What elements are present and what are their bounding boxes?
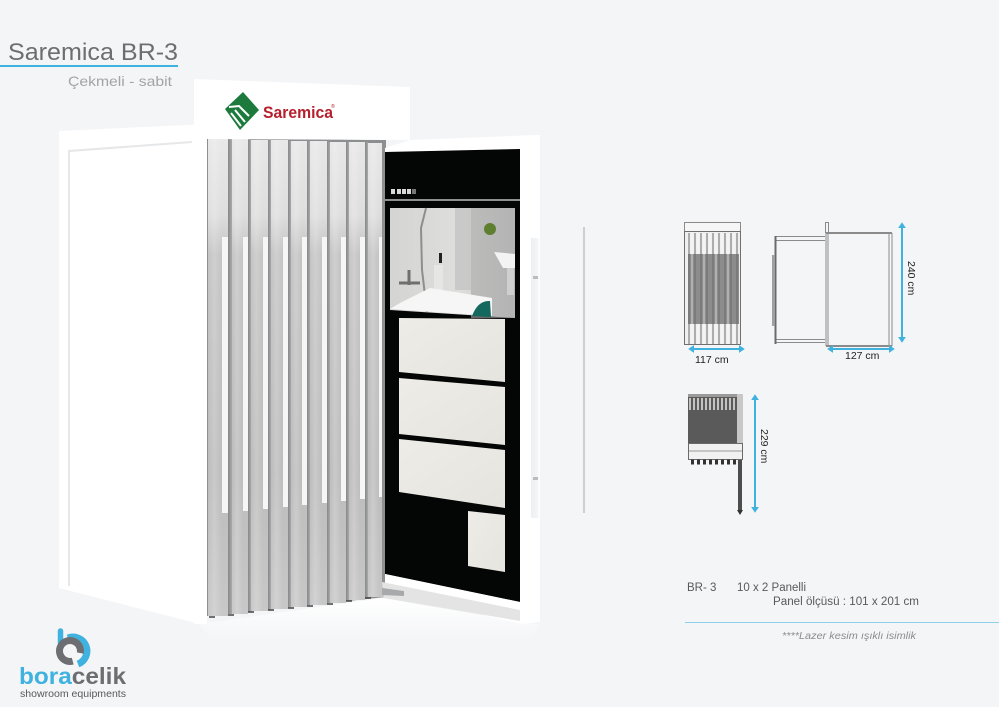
pull-out slats	[208, 139, 384, 616]
dimension: 240 cm: 240 cm	[905, 261, 917, 296]
registered mark: ®	[331, 103, 335, 110]
dimension: 117 cm: 117 cm	[695, 354, 729, 366]
door base shadow	[382, 582, 520, 621]
floor reflection	[200, 598, 540, 640]
dimension: 117 cm	[690, 347, 743, 366]
header sign	[194, 79, 410, 140]
door handle	[531, 238, 540, 518]
pull-out door frame	[385, 135, 540, 624]
white bottom lip	[385, 574, 520, 607]
slat gaps	[228, 139, 368, 614]
bottles	[434, 265, 443, 295]
shower screen	[455, 208, 471, 290]
right wall shade	[471, 208, 515, 318]
dimension: 229 cm: 229 cm	[758, 429, 770, 464]
plant	[484, 223, 496, 235]
specs text: Panel ölçüsü : 101 x 201 cm	[773, 596, 919, 608]
sink	[494, 252, 515, 268]
door side strip	[382, 143, 385, 583]
small icons	[391, 189, 416, 194]
specs text	[687, 582, 919, 608]
slat highlights	[208, 139, 379, 616]
title: Saremica BR-3	[8, 39, 178, 66]
specs rule	[685, 622, 999, 623]
top plan drawing	[772, 222, 892, 346]
specs text: 10 x 2 Panelli	[737, 582, 806, 594]
logo mark	[225, 92, 259, 130]
Saremica logo	[225, 92, 335, 130]
left side wall	[59, 124, 207, 624]
front elevation drawing	[684, 222, 740, 344]
specs text: BR- 3	[687, 582, 716, 594]
base bracket	[382, 588, 404, 596]
dimension: 127 cm	[829, 347, 893, 362]
front post	[194, 124, 207, 624]
illustration: display unit	[59, 79, 540, 640]
footnote: ****Lazer kesim ışıklı isimlik	[782, 630, 917, 642]
subtitle: Çekmeli - sabit	[68, 73, 172, 89]
black panel	[385, 149, 520, 602]
logo wordmark: Saremica	[263, 103, 333, 122]
slat handles	[222, 237, 384, 513]
dimension: 240 cm	[900, 224, 917, 341]
logo tagline: showroom equipments	[20, 688, 126, 700]
dimension: 127 cm: 127 cm	[845, 350, 880, 362]
shower hose	[421, 208, 427, 312]
vertical divider	[584, 227, 585, 513]
faucet	[399, 270, 420, 285]
slat feet	[209, 598, 371, 617]
title underline	[0, 65, 178, 67]
sample tiles	[399, 318, 505, 572]
bathroom photo	[390, 208, 515, 318]
towel	[472, 301, 491, 317]
panel divider	[385, 199, 520, 201]
logo symbol	[57, 631, 87, 664]
boracelik logo	[19, 631, 126, 700]
side elevation drawing	[688, 394, 743, 515]
dimension: 229 cm	[753, 396, 770, 511]
slat backdrop	[207, 138, 386, 616]
bathtub	[390, 288, 492, 316]
logo wordmark: boracelik	[19, 663, 126, 689]
